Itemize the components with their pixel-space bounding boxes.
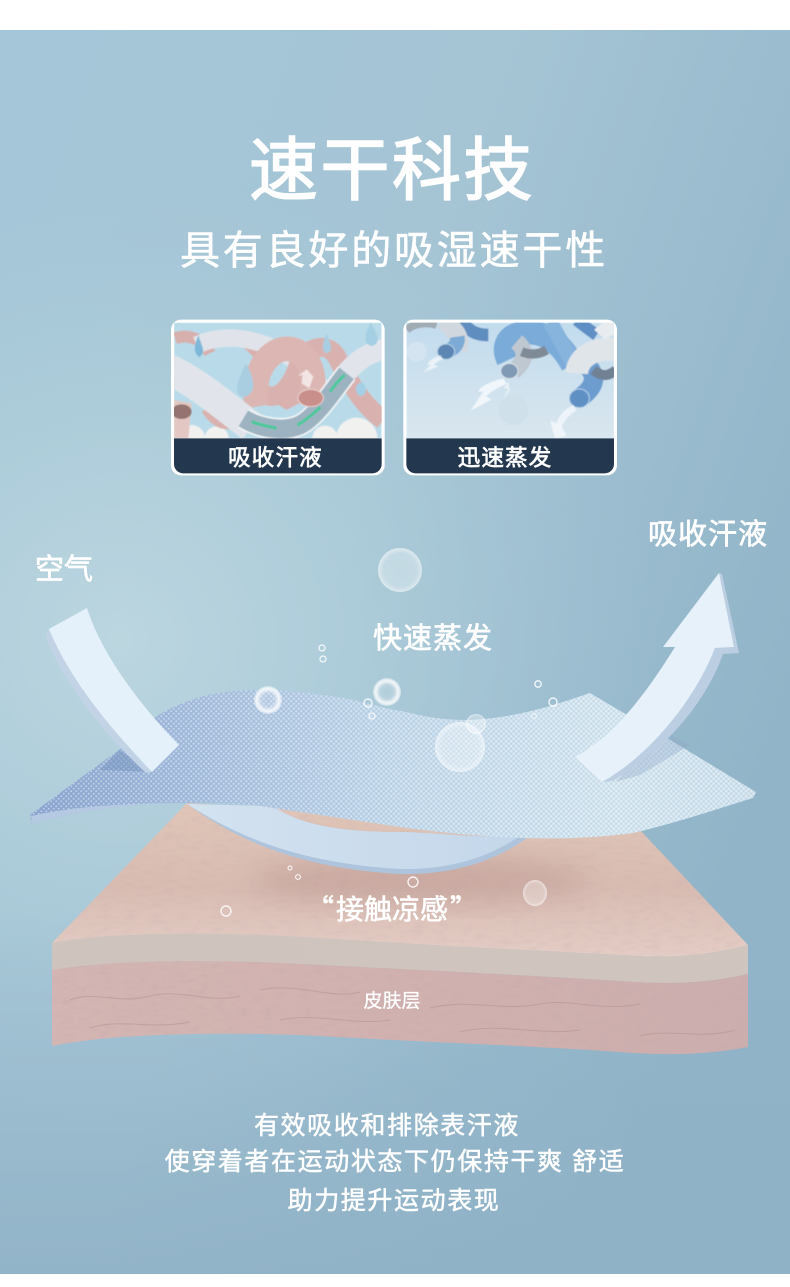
body copy: 使穿着者在运动状态下仍保持干爽 舒适 bbox=[165, 1148, 625, 1176]
label: air: 空气 bbox=[35, 553, 93, 586]
skin lower layer bbox=[52, 961, 748, 1054]
skin top surface bbox=[52, 803, 748, 957]
subtitle: 具有良好的吸湿速干性 bbox=[180, 229, 608, 273]
right arrow: sweat wicking bbox=[575, 573, 739, 782]
card: absorb sweat bbox=[167, 320, 387, 475]
label: skin layer: 皮肤层 bbox=[363, 990, 421, 1012]
left arrow strip: air bbox=[46, 608, 179, 773]
panel: cards bbox=[167, 320, 618, 475]
card: fast evaporation bbox=[403, 320, 618, 475]
skin middle layer bbox=[52, 934, 748, 983]
illustration: fibres and vapour bbox=[406, 320, 618, 438]
label: fast evaporation: 快速蒸发 bbox=[373, 622, 493, 655]
body copy: 有效吸收和排除表汗液 bbox=[254, 1112, 520, 1140]
label: cool touch: “接触凉感” bbox=[306, 888, 478, 928]
caption: 吸收汗液 bbox=[228, 444, 323, 470]
caption bar bbox=[406, 438, 614, 473]
fabric curved underside band bbox=[187, 804, 527, 874]
bubbles bbox=[221, 548, 557, 916]
body copy bbox=[165, 1112, 625, 1215]
label: absorb sweat: 吸收汗液 bbox=[648, 518, 768, 551]
skin block bbox=[52, 803, 748, 1054]
illustration: fibres and droplets bbox=[174, 322, 382, 438]
fabric sheet bbox=[30, 690, 756, 838]
caption bar bbox=[174, 438, 382, 473]
caption: 迅速蒸发 bbox=[458, 444, 552, 470]
title: 速干科技 bbox=[249, 132, 535, 209]
body copy: 助力提升运动表现 bbox=[288, 1187, 500, 1215]
